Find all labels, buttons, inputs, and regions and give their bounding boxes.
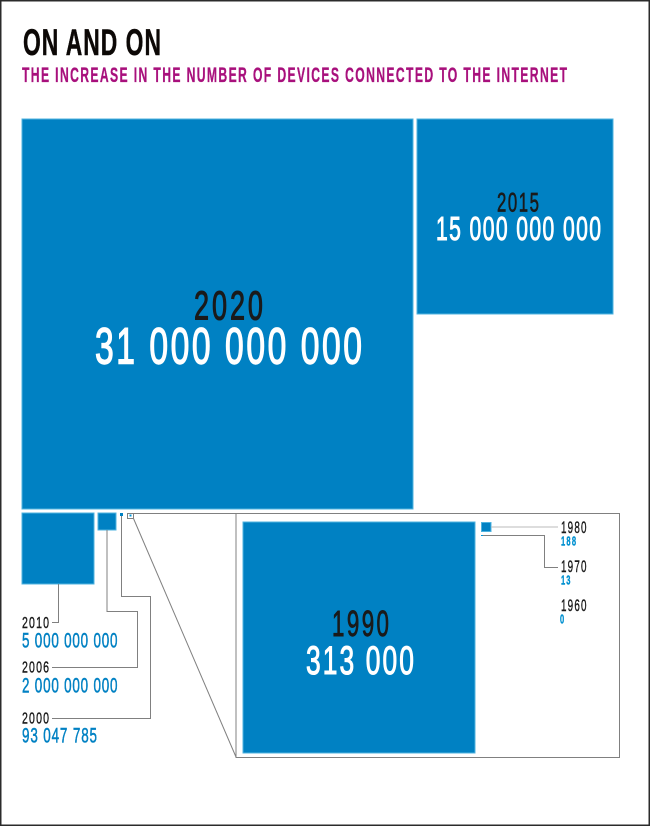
square: 2020: 2020 — [194, 284, 263, 329]
label: 1970 — [561, 556, 587, 588]
square: 1990 — [243, 522, 475, 753]
square: 2015 — [417, 119, 613, 314]
connector: 2010 — [52, 584, 58, 622]
label: 2010: 2010 — [22, 614, 49, 632]
square: 1970 — [481, 535, 483, 536]
zoom line — [134, 518, 236, 757]
square: 2015: 2015 — [497, 187, 539, 218]
connector: 2000 — [52, 516, 150, 718]
label: 1980: 188 — [561, 536, 576, 549]
zoom marker — [128, 514, 134, 518]
label: 1970: 13 — [561, 575, 571, 588]
square: 2000 — [120, 513, 123, 516]
label: 2006: 2 000 000 000 — [22, 673, 118, 697]
connector: 1980 — [491, 526, 558, 528]
label: 2006: 2006 — [22, 658, 49, 676]
label: 1980: 1980 — [561, 517, 587, 537]
label: 2000: 93 047 785 — [22, 723, 97, 747]
inset panel — [134, 514, 620, 758]
label: 2000: 2000 — [22, 709, 49, 727]
label: 1960: 1960 — [561, 595, 587, 615]
label: 1980 — [561, 517, 587, 549]
label: 2006 — [22, 658, 118, 697]
square: 2020 — [22, 119, 413, 509]
subtitle: THE INCREASE IN THE NUMBER OF DEVICES CONNECTED TO THE INTERNET — [22, 62, 567, 87]
title: ON AND ON — [23, 21, 161, 63]
square: 2020: 31 000 000 000 — [95, 319, 362, 375]
label: 2010 — [22, 614, 118, 652]
square: 2006 — [98, 513, 116, 530]
label: 1960 — [560, 595, 587, 627]
square: 2010 — [22, 513, 94, 584]
label: 2010: 5 000 000 000 — [22, 628, 118, 652]
square: 1990: 313 000 — [306, 639, 414, 683]
label: 1960: 0 — [560, 614, 564, 627]
connector: 2006 — [52, 530, 138, 668]
square: 2015: 15 000 000 000 — [436, 210, 601, 247]
square: 1980 — [482, 522, 491, 532]
connector: 1970 — [483, 536, 558, 568]
square: 1990: 1990 — [332, 605, 389, 644]
label: 1970: 1970 — [561, 556, 587, 576]
label: 2000 — [22, 709, 97, 747]
